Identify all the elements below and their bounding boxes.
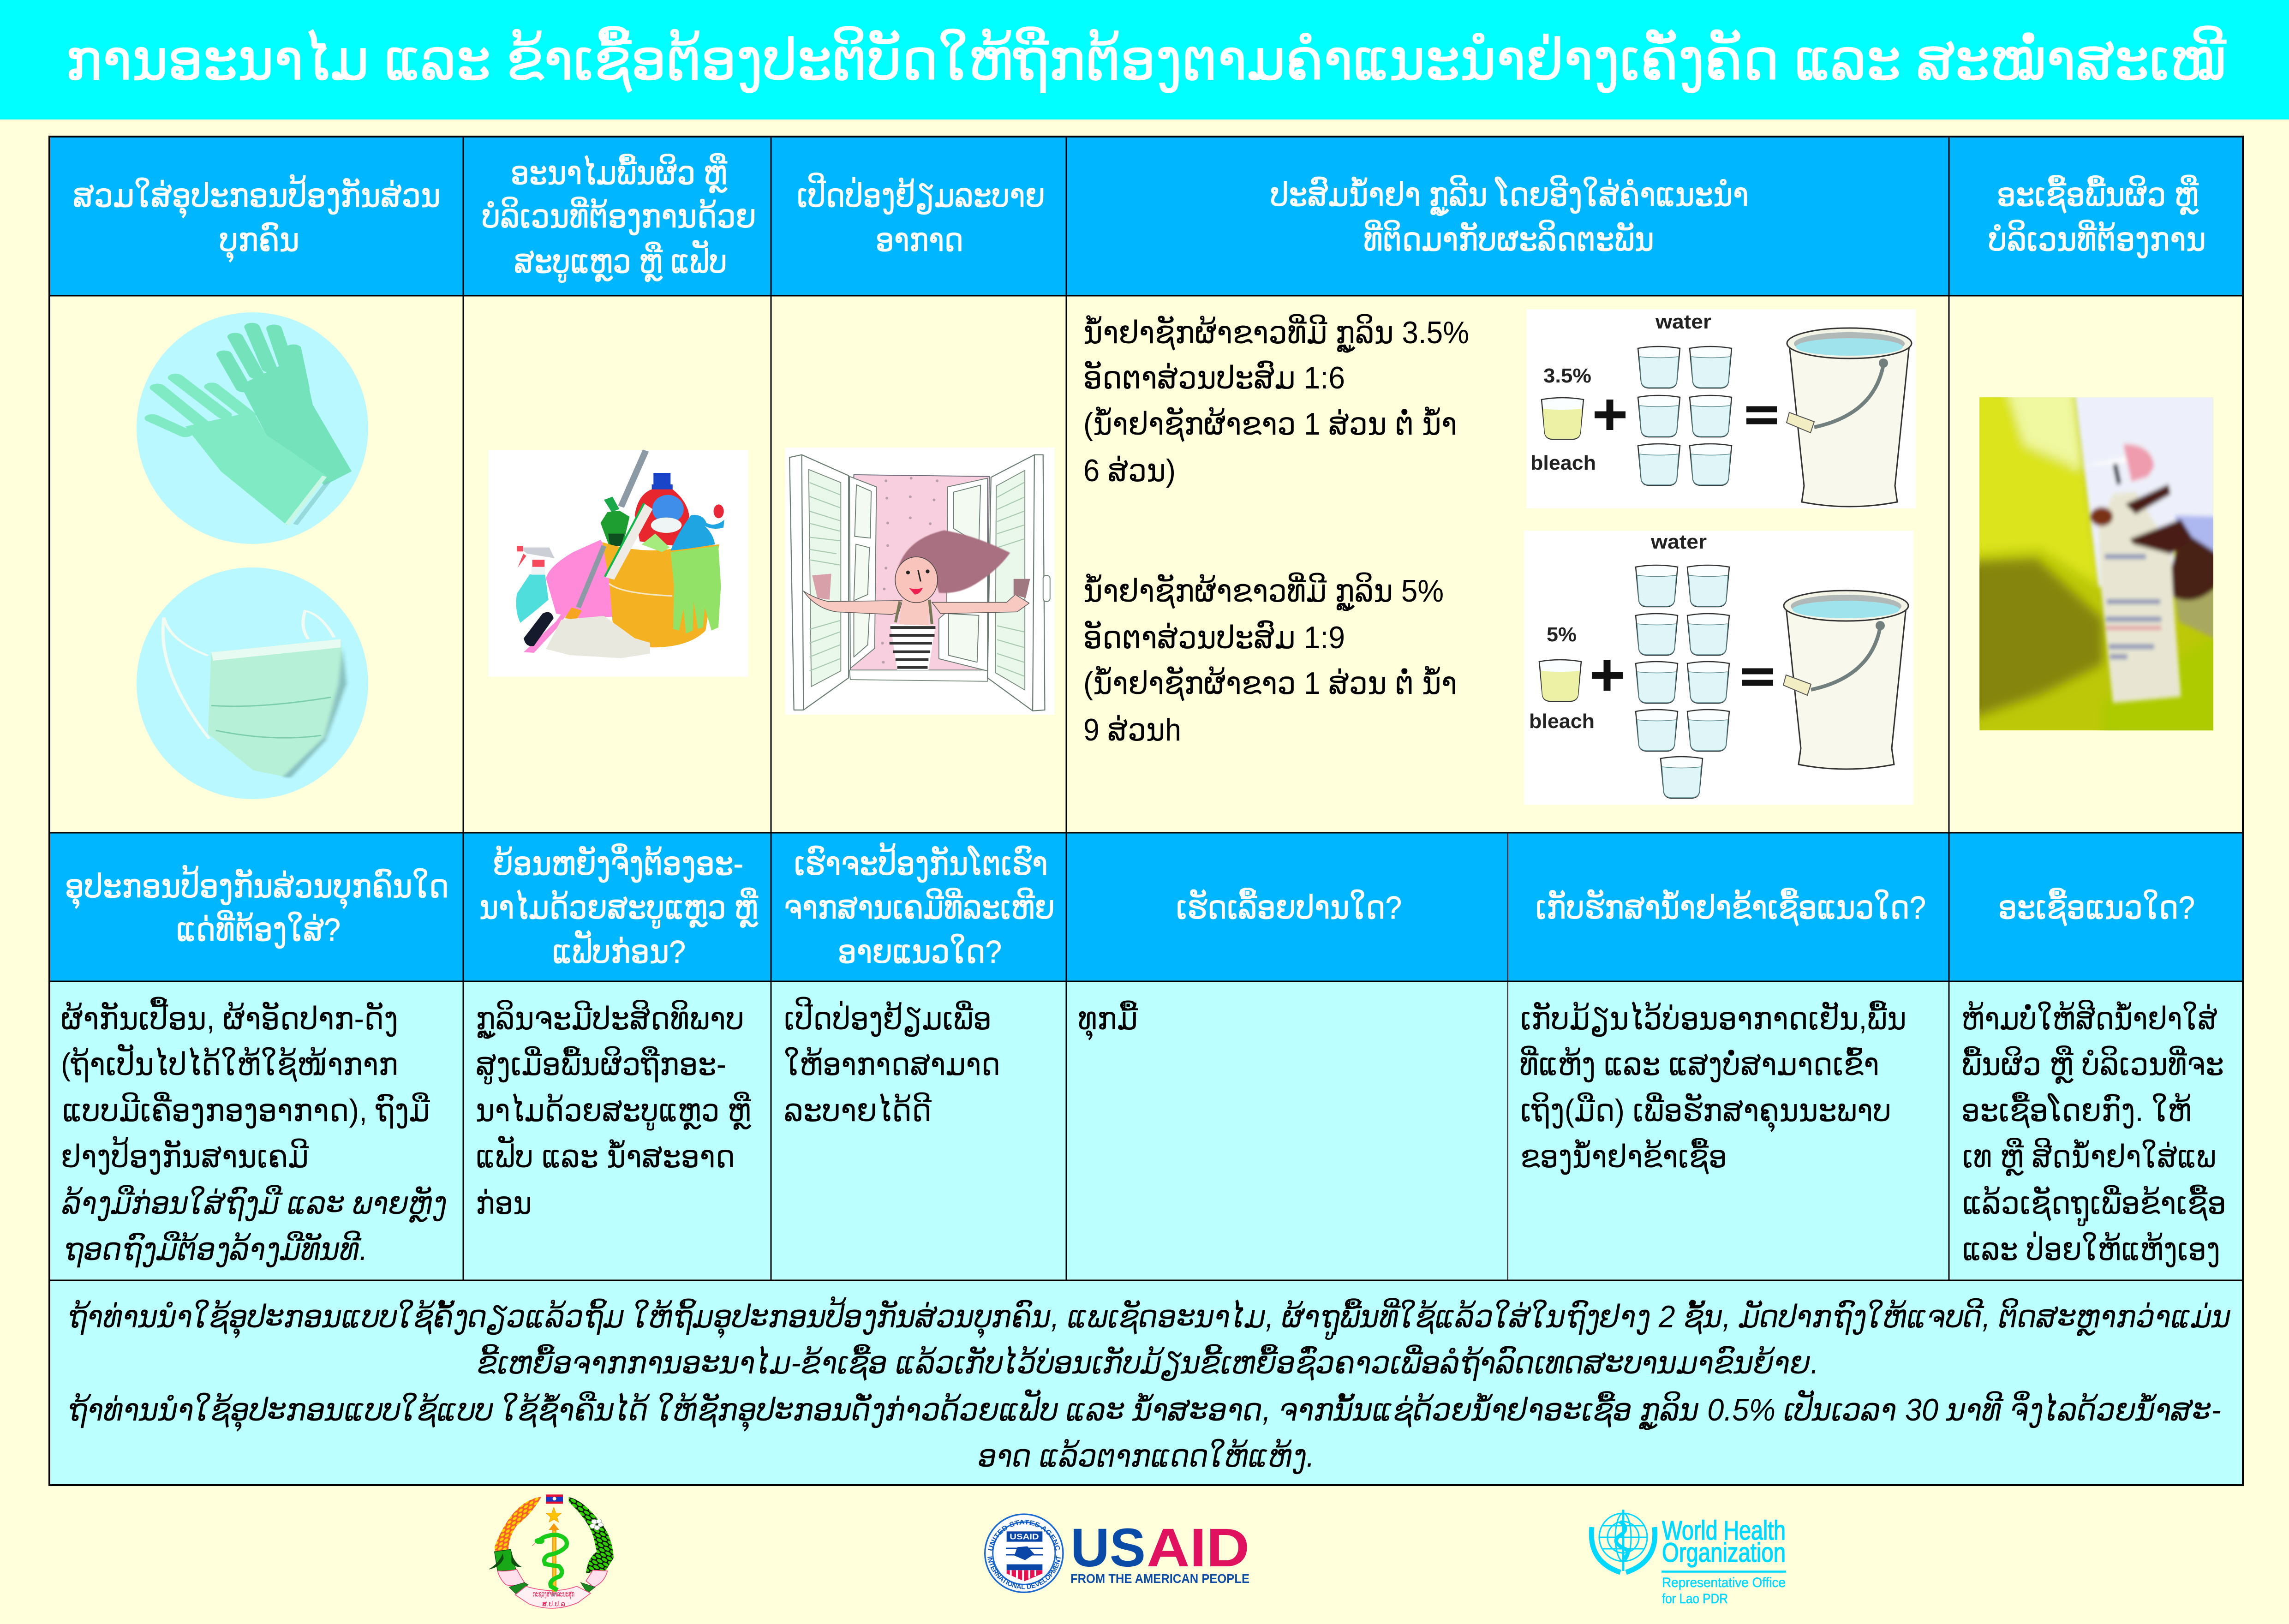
wheat: [495, 1497, 541, 1552]
answer 6: [1961, 999, 2226, 1267]
text: 3.5% bleach ratio: ນໍ້າຢາຊັກຜ້າຂາວທີ່ມີ ກູຼລິນ 3.5%: [1083, 313, 1469, 353]
usaid seal: INTERNATIONAL DEVELOPMENT: [986, 1555, 1063, 1591]
image: open window: [785, 448, 1055, 715]
answer 2: ກ່ອນ: [476, 1186, 532, 1221]
question 6: ອະເຊື້ອແນວໃດ?: [1998, 888, 2195, 926]
step 2 heading: ອະນາໄມພື້ນຜິວ ຫຼື: [511, 154, 728, 193]
text: 3.5% bleach ratio: (ນໍ້າຢາຊັກຜ້າຂາວ 1 ສ່ວນ ຕໍ່ ນໍ້າ: [1083, 406, 1457, 442]
ribbons: [497, 1570, 525, 1586]
answer 3: ໃຫ້ອາກາດສາມາດ: [784, 1047, 1000, 1082]
image: cleaning supplies: [488, 450, 748, 677]
question 2: [479, 844, 759, 970]
diagram: 3.5% mix: water: [1655, 310, 1711, 333]
snake: [538, 1535, 567, 1590]
panel: disposal notes: [49, 1280, 2243, 1486]
text: 5% bleach ratio: (ນໍ້າຢາຊັກຜ້າຂາວ 1 ສ່ວນ ຕໍ່ ນໍ້າ: [1083, 666, 1457, 701]
image: spraying disinfectant bottle photo: [1979, 397, 2213, 731]
answer 6: ອະເຊື້ອໂດຍກົງ. ໃຫ້: [1961, 1091, 2192, 1128]
usaid seal: UNITED STATES AGENCY: [980, 1503, 1061, 1552]
star: [546, 1507, 562, 1522]
flag: [546, 1494, 563, 1504]
panel: disposal notes: ຂີ້ເຫຍື້ອຈາກການອະນາໄມ-ຂ້າເຊື້ອ ແລ້ວເກັບໄວ້ບ່ອນເກັບມ້ຽນຂີ້ເຫຍື້ອຊົ່ວຄາວເພື່ອລໍຖ້າລົດເທດສະບານມາຂົນຍ້າຍ.: [477, 1343, 1819, 1381]
answer 4: ທຸກມື້: [1078, 1000, 1138, 1040]
usaid wordmark: AID: [1147, 1517, 1249, 1578]
question 1: ອຸປະກອນປ້ອງກັນສ່ວນບຸກຄົນໃດ: [65, 866, 449, 909]
answer 5: [1519, 1000, 1907, 1175]
usaid wordmark: US: [1070, 1517, 1146, 1578]
answer 1: ແບບມີເຄື່ອງກອງອາກາດ), ຖົງມື: [62, 1091, 430, 1128]
question 1: ແດ່ທີ່ຕ້ອງໃສ່?: [176, 910, 341, 948]
answer 6: ເທ ຫຼື ສີດນໍ້າຢາໃສ່ແພ: [1962, 1137, 2216, 1176]
step 4 heading: ທີ່ຕິດມາກັບຜະລິດຕະພັນ: [1363, 220, 1654, 257]
diagram: 5% mix: water: [1650, 531, 1707, 553]
diagram: 3.5% mix: bleach: [1530, 452, 1596, 474]
step 5 heading: ບໍລິເວນທີ່ຕ້ອງການ: [1988, 220, 2206, 258]
icon: gloves: [137, 312, 368, 544]
text: 3.5% bleach ratio: [1083, 313, 1469, 488]
laurel leaves: [569, 1497, 614, 1573]
panel: disposal notes: ອາດ ແລ້ວຕາກແດດໃຫ້ແຫ້ງ.: [978, 1438, 1315, 1474]
panel: step headers row: [49, 136, 2243, 296]
question 3: ເຮົາຈະປ້ອງກັນໂຕເຮົາ: [794, 843, 1048, 882]
question 2: ຍ້ອນຫຍັງຈຶ່ງຕ້ອງອະ-: [493, 844, 743, 882]
question 2: ແຟັບກ່ອນ?: [552, 930, 686, 970]
text: 5% bleach ratio: ອັດຕາສ່ວນປະສົມ 1:9: [1083, 620, 1345, 655]
question 3: ອາຍແນວໃດ?: [838, 934, 1002, 970]
step 2 heading: ບໍລິເວນທີ່ຕ້ອງການດ້ວຍ: [482, 197, 756, 235]
answer 5: ເຖິງ(ມືດ) ເພື່ອຮັກສາຄຸນນະພາບ: [1520, 1092, 1891, 1132]
diagram: 5% mix: bleach: [1529, 710, 1595, 733]
answer 2: ແຟັບ ແລະ ນໍ້າສະອາດ: [476, 1136, 735, 1174]
answer 5: ເກັບມ້ຽນໄວ້ບ່ອນອາກາດເຢັນ,ພື້ນ: [1520, 1000, 1907, 1037]
answer 1: ຜ້າກັນເປື້ອນ, ຜ້າອັດປາກ-ດັງ: [61, 996, 398, 1037]
usaid wordmark: [1070, 1517, 1249, 1578]
answer 6: ແລະ ປ່ອຍໃຫ້ແຫ້ງເອງ: [1962, 1231, 2220, 1267]
logo: Lao Ministry of Health emblem: ກະຊວງສາທາລະນະສຸກ: [533, 1590, 574, 1600]
panel: answers row: [49, 981, 2243, 1280]
panel: questions row: [49, 833, 2243, 981]
usaid seal: USAID: [1010, 1532, 1039, 1541]
answer 3: [784, 996, 1000, 1128]
usaid seal: [980, 1503, 1063, 1592]
step 5 heading: [1988, 175, 2206, 258]
logo: Lao Ministry of Health emblem: ສ.ປ.ປ.ລ: [542, 1601, 565, 1608]
answer 2: [476, 999, 752, 1221]
step 4 heading: [1270, 175, 1749, 257]
who name: [1662, 1516, 1786, 1606]
usaid tagline: FROM THE AMERICAN PEOPLE: [1070, 1571, 1249, 1586]
icon: face mask: [137, 567, 368, 799]
answer 6: ແລ້ວເຊັດຖູເພື່ອຂ້າເຊື້ອ: [1962, 1184, 2226, 1226]
logo: World Health Organization: [1591, 1510, 1786, 1606]
answer 2: ນາໄມດ້ວຍສະບູແຫຼວ ຫຼື: [476, 1091, 752, 1131]
answer 5: ທີ່ແຫ້ງ ແລະ ແສງບໍ່ສາມາດເຂົ້າ: [1519, 1045, 1879, 1082]
text: 5% bleach ratio: [1083, 572, 1457, 747]
title: ການອະນາໄມ ແລະ ຂ້າເຊື້ອຕ້ອງປະຕິບັດໃຫ້ຖືກຕ້ອງຕາມຄໍາແນະນໍາຢ່າງເຄັ່ງຄັດ ແລະ ສະໝໍ່າສະເໝີ: [66, 26, 2226, 93]
answer 3: ເປີດປ່ອງຢ້ຽມເພື່ອ: [784, 996, 992, 1037]
answer 1: ຖອດຖົງມືຕ້ອງລ້າງມືທັນທີ.: [64, 1230, 368, 1267]
question 3: ຈາກສານເຄມີທີ່ລະເຫີຍ: [784, 888, 1055, 925]
question 2: ນາໄມດ້ວຍສະບູແຫຼວ ຫຼື: [479, 888, 759, 928]
text: 3.5% bleach ratio: ອັດຕາສ່ວນປະສົມ 1:6: [1083, 360, 1345, 395]
who name: Representative Office: [1662, 1575, 1786, 1590]
question 3: [784, 843, 1055, 970]
diagram: 3.5% mix: [1526, 309, 1916, 508]
flower: [590, 1519, 603, 1530]
diagram: 5% mix: 5%: [1547, 623, 1577, 646]
step 1 heading: ສວມໃສ່ອຸປະກອນປ້ອງກັນສ່ວນ: [73, 175, 441, 218]
text: 5% bleach ratio: 9 ສ່ວນh: [1083, 712, 1181, 747]
step 1 heading: [73, 175, 441, 263]
diagram: 3.5% mix: 3.5%: [1543, 364, 1591, 387]
logo: Lao Ministry of Health emblem: [489, 1494, 614, 1608]
step 3 heading: ເປີດປ່ອງຢ້ຽມລະບາຍ: [797, 173, 1045, 214]
step 2 heading: ສະບູແຫຼວ ຫຼື ແຟັບ: [514, 240, 727, 282]
answer 5: ຂອງນໍ້າຢາຂ້າເຊື້ອ: [1520, 1137, 1727, 1175]
step 3 heading: [797, 173, 1045, 258]
answer 1: ຢາງປ້ອງກັນສານເຄມີ: [61, 1136, 309, 1175]
answer 6: ພື້ນຜິວ ຫຼື ບໍລິເວນທີ່ຈະ: [1961, 1045, 2224, 1084]
step 4 heading: ປະສົມນໍ້າຢາ ກູຼລີນ ໂດຍອີງໃສ່ຄໍາແນະນໍາ: [1270, 175, 1749, 215]
title banner: [0, 0, 2289, 119]
answer 1: [61, 996, 447, 1267]
text: 3.5% bleach ratio: 6 ສ່ວນ): [1083, 453, 1176, 488]
step 1 heading: ບຸກຄົນ: [219, 222, 299, 263]
question 5: ເກັບຮັກສານໍ້າຢາຂ້າເຊື້ອແນວໃດ?: [1536, 888, 1926, 926]
answer 1: ລ້າງມືກ່ອນໃສ່ຖົງມື ແລະ ພາຍຫຼັງ: [61, 1184, 447, 1223]
answer 1: (ຖ້າເປັນໄປໄດ້ໃຫ້ໃຊ້ໜ້າກາກ: [61, 1044, 398, 1082]
who name: World Health: [1662, 1516, 1786, 1546]
answer 6: ຫ້າມບໍ່ໃຫ້ສີດນໍ້າຢາໃສ່: [1961, 999, 2217, 1036]
answer 2: ສູງເມື່ອພື້ນຜິວຖືກອະ-: [476, 1045, 726, 1085]
staff: [549, 1523, 559, 1592]
logo: USAID: [980, 1503, 1249, 1592]
answer 2: ກູຼລິນຈະມີປະສິດທິພາບ: [476, 999, 744, 1039]
who name: Organization: [1662, 1538, 1786, 1568]
question 1: [65, 866, 449, 948]
text: 5% bleach ratio: ນໍ້າຢາຊັກຜ້າຂາວທີ່ມີ ກູຼລິນ 5%: [1083, 572, 1444, 611]
step 3 heading: ອາກາດ: [876, 222, 963, 258]
step 5 heading: ອະເຊື້ອພື້ນຜິວ ຫຼື: [1997, 175, 2199, 215]
step 2 heading: [482, 154, 756, 282]
panel: disposal notes: ຖ້າທ່ານນໍາໃຊ້ອຸປະກອນແບບໃຊ້ແບບ ໃຊ້ຊໍ້າຄືນໄດ້ ໃຫ້ຊັກອຸປະກອນດັ່ງກ່າວດ້ວຍແຟັບ ແລະ ນໍ້າສະອາດ, ຈາກນັ້ນແຊ່ດ້ວຍນໍ້າຢາອະເຊື້ອ ກູຼລິນ 0.5% ເປັນເວລາ 30 ນາທີ ຈຶ່ງໄລດ້ວຍນໍ້າສະ-: [67, 1389, 2221, 1432]
question 4: ເຮັດເລື້ອຍປານໃດ?: [1176, 888, 1402, 925]
answer 3: ລະບາຍໄດ້ດີ: [784, 1092, 932, 1128]
who name: for Lao PDR: [1662, 1591, 1728, 1606]
who emblem: [1591, 1510, 1655, 1572]
diagram: 5% mix: [1524, 531, 1913, 805]
